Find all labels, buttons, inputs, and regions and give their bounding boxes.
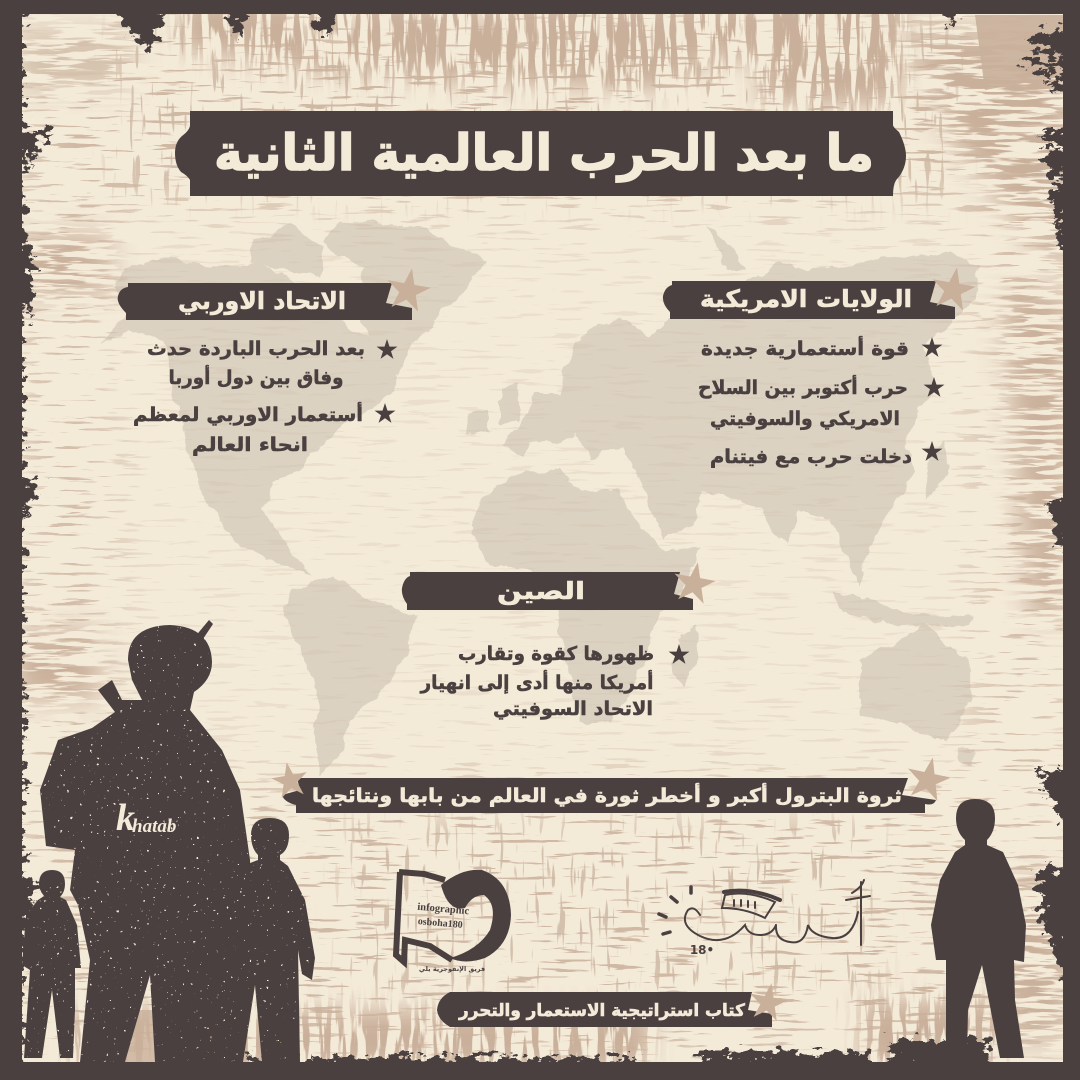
ribbon [282, 778, 936, 813]
ribbon star [383, 265, 434, 313]
ribbon [437, 992, 772, 1027]
Khatab signature: k [116, 797, 135, 839]
heading ribbon: European Union [118, 283, 412, 320]
heading text: الصين [497, 577, 585, 605]
bullet text: ظهورها كقوة وتقارب [458, 643, 654, 665]
far-left soldier [22, 870, 81, 1058]
title banner [175, 111, 906, 196]
bullet star [375, 403, 395, 423]
bullet text: أستعمار الاوربي لمعظم [133, 402, 363, 426]
ink swirl [441, 870, 511, 962]
bullet star [922, 337, 942, 357]
bullet text line 2: الامريكي والسوفيتي [710, 408, 900, 430]
world map [100, 221, 980, 776]
bullet star [669, 644, 689, 664]
open book crown [722, 894, 775, 918]
small right soldier [222, 818, 315, 1062]
logo: infographic osboha180 [396, 870, 511, 973]
logo text line 2: osboha180 [417, 916, 463, 931]
star [746, 980, 790, 1022]
heading ribbon: United States [663, 281, 955, 319]
Khatab signature: hatab [132, 816, 176, 837]
ribbon star [928, 264, 979, 312]
heading text: الاتحاد الاوربي [178, 287, 346, 315]
bullet text: حرب أكتوبر بين السلاح [698, 375, 908, 399]
logo: Osboha 180 [659, 880, 870, 957]
book source banner [437, 980, 790, 1027]
number 180: 18• [690, 943, 714, 957]
bullet star [922, 441, 942, 461]
bullet star [377, 339, 397, 359]
soldiers silhouettes [22, 620, 1026, 1062]
bullet text line 2: أمريكا منها أدى إلى انهيار [420, 670, 654, 694]
bullet text: دخلت حرب مع فيتنام [710, 446, 912, 468]
logo caption: فريق الإنفوجرية يلي [419, 965, 485, 973]
ribbon star [670, 559, 718, 605]
banner text: كتاب استراتيجية الاستعمار والتحرر [458, 1001, 745, 1021]
bullet text: بعد الحرب الباردة حدث [147, 338, 365, 360]
bullet star [924, 377, 944, 397]
bullet text line 2: وفاق بين دول أوربا [168, 365, 344, 389]
book outline [396, 872, 452, 962]
panel: United States [663, 264, 979, 468]
bullet text line 3: الاتحاد السوفيتي [493, 698, 653, 720]
main soldier [40, 620, 252, 1062]
sun rays [659, 887, 691, 934]
title text: ما بعد الحرب العالمية الثانية [214, 124, 874, 183]
Khatab signature [116, 797, 176, 839]
right star [903, 753, 954, 803]
panel: China [402, 559, 718, 720]
heading ribbon: China [402, 572, 693, 610]
handwritten word [685, 880, 870, 945]
panel: European Union [118, 265, 434, 456]
logo text: infographic [417, 902, 470, 917]
bullet text line 2: انحاء العالم [192, 434, 308, 456]
callout: petroleum banner [269, 753, 954, 813]
right soldier [931, 799, 1026, 1058]
180 tally [734, 900, 755, 908]
banner text: ثروة البترول أكبر و أخطر ثورة في العالم من بابها ونتائجها [312, 783, 902, 807]
heading text: الولايات الامريكية [700, 285, 912, 313]
left star [269, 759, 310, 799]
bullet text: قوة أستعمارية جديدة [701, 336, 909, 360]
